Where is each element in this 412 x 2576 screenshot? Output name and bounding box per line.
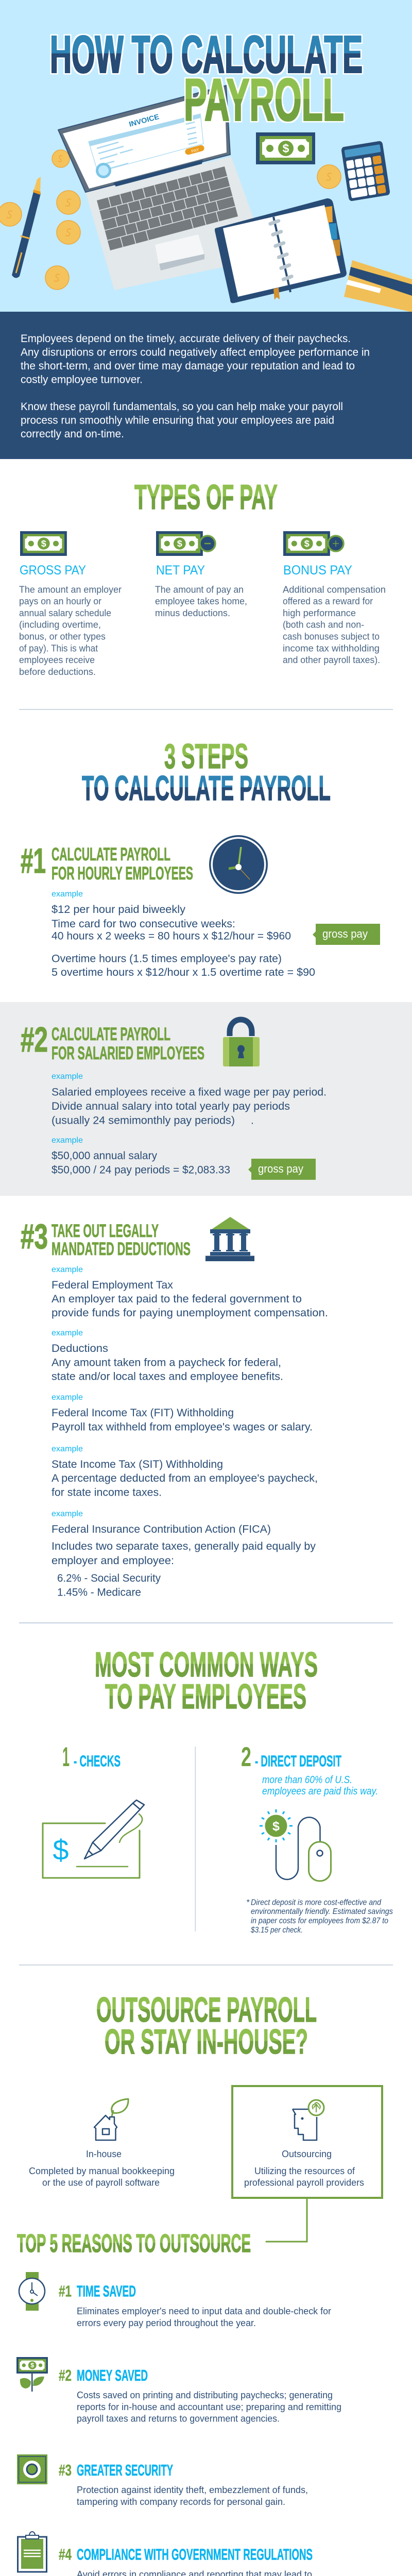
panel: step 1: 40 hours x 2 weeks = 80 hours x $12/hour = $960 [52,930,291,942]
panel: reason 1: TIME SAVED [77,2282,136,2300]
panel: gross pay: GROSS PAY [20,563,86,578]
panel: checks: - CHECKS [74,1752,121,1770]
panel: step 2: Divide annual salary into total yearly pay periods [52,1100,290,1112]
panel: step 1: CALCULATE PAYROLL [52,844,170,865]
panel: reason 1 [19,2272,331,2328]
panel: step 3: Federal Employment Tax [52,1279,173,1291]
invoice screen content: PAY [191,147,200,154]
panel: step 2: $50,000 annual salary [52,1150,157,1162]
panel: step 2 [0,1002,412,1196]
panel: step 1: #1 [21,841,46,880]
panel: bonus pay: offered as a reward for [283,596,373,606]
icon: safe [17,2454,47,2484]
panel: in-house: or the use of payroll software [42,2177,160,2188]
callout: gross pay: gross pay [258,1162,303,1175]
icon: credit card [344,260,412,312]
panel: bonus pay: high performance [283,608,356,618]
panel: step 2: example [52,1072,83,1081]
panel: step 3: TAKE OUT LEGALLY [52,1221,159,1241]
panel: step 1: Overtime hours (1.5 times employee's pay rate) [52,953,282,964]
intro band: costly employee turnover. [21,374,143,385]
invoice screen content [89,112,205,178]
icon: calculator [341,141,390,201]
panel: step 3: State Income Tax (SIT) Withholding [52,1459,223,1470]
panel: reason 3: GREATER SECURITY [77,2461,173,2479]
icon: mouse and dollar [260,1809,331,1881]
panel: reason 3: #3 [59,2461,72,2479]
panel: reason 3: Protection against identity theft, embezzlement of funds, [77,2485,308,2495]
intro band: the short-term, and over time may damage your reputation and lead to [21,360,355,372]
panel: step 3: #3 [21,1217,48,1256]
hero panel [0,0,412,312]
icon: mouse and dollar: $ [272,1819,280,1834]
intro band: correctly and on-time. [21,428,124,440]
panel: reason 4 [18,2532,313,2576]
panel: direct deposit: - DIRECT DEPOSIT [255,1752,341,1770]
panel: reason 2: reports for in-house and accountant use; preparing and remitting [77,2402,341,2412]
icon: dollar bill [256,132,315,164]
icon: clipboard [18,2532,46,2572]
callout: gross pay [313,924,380,945]
panel: gross pay: annual salary schedule [19,608,111,618]
panel: step 1 [21,835,380,978]
panel: step 3: 1.45% - Medicare [57,1587,141,1598]
panel: in-house [29,2099,175,2188]
panel: reason 2 [16,2357,341,2424]
panel: reason 2: payroll taxes and returns to government agencies. [77,2414,280,2424]
icon: bank building [205,1217,254,1261]
icon: dollar bill: $ [283,142,289,155]
heading: types of pay: TYPES OF PAY [134,478,278,517]
panel: direct deposit: more than 60% of U.S. [262,1774,352,1786]
icon: bill: $ [41,538,46,549]
footnote: Direct deposit is more cost-effective and [251,1898,382,1907]
panel: bonus pay [283,531,386,665]
icon: laptop [58,86,268,290]
footnote: in paper costs for employees from $2.87 to [251,1917,388,1925]
icon: bill plus [283,531,344,556]
icon: head with tree [293,2100,324,2140]
panel: reason 4: #4 [59,2546,72,2564]
icon: money plant [16,2357,48,2392]
panel: step 3: example [52,1445,83,1453]
panel: direct deposit: 2 [241,1742,251,1772]
panel: reason 1: #1 [59,2282,72,2300]
panel: step 3: example [52,1265,83,1274]
panel: step 1: 5 overtime hours x $12/hour x 1.5 overtime rate = $90 [52,967,315,978]
panel: step 3: employer and employee: [52,1555,174,1567]
footnote: $3.15 per check. [250,1926,303,1935]
panel: step 3: 6.2% - Social Security [57,1572,161,1584]
intro band: Know these payroll fundamentals, so you can help make your payroll [21,401,343,413]
icon: house with leaf [94,2099,128,2140]
panel: step 1: Time card for two consecutive weeks: [52,918,235,930]
panel: gross pay: (including overtime, [19,620,101,630]
panel: step 2: #2 [21,1020,48,1059]
panel: bonus pay: cash bonuses subject to [283,632,380,642]
panel: reason 1: Eliminates employer's need to input data and double-check for [77,2306,331,2316]
panel: step 3: state and/or local taxes and employee benefits. [52,1371,283,1383]
footnote [246,1898,393,1935]
intro band [0,312,412,459]
intro band: Employees depend on the timely, accurate delivery of their paychecks. [21,333,351,345]
panel: in-house: Completed by manual bookkeeping [29,2166,175,2176]
panel: reason 3: tampering with company records for personal gain. [77,2497,285,2507]
panel: reason 1: errors every pay period throughout the year. [77,2318,256,2328]
panel: bonus pay: BONUS PAY [283,563,352,578]
icon: padlock [223,1020,260,1066]
panel: direct deposit [241,1742,393,1935]
panel: step 1: example [52,890,83,899]
panel: outsourcing: professional payroll providers [244,2177,364,2188]
panel: outsourcing [232,2086,382,2198]
panel: step 3: Includes two separate taxes, generally paid equally by [52,1540,316,1552]
icon: bill minus [156,531,215,556]
panel: bonus pay: Additional compensation [283,584,386,595]
panel: gross pay: bonus, or other types [19,632,106,642]
panel: reason 2: MONEY SAVED [77,2366,148,2384]
panel: reason 3 [17,2454,308,2507]
panel: step 2: example [52,1136,83,1145]
panel: step 3 [21,1217,328,1598]
panel: gross pay: pays on an hourly or [19,596,101,606]
panel: reason 2: #2 [59,2366,72,2384]
panel: step 3: example [52,1393,83,1402]
panel: step 3: example [52,1329,83,1337]
heading: 3 steps [82,737,331,808]
icon: clock [209,835,268,894]
panel: step 2: $50,000 / 24 pay periods = $2,083.33 [52,1164,230,1176]
callout: gross pay: gross pay [322,927,368,940]
heading: outsource payroll [96,1990,317,2061]
panel: step 3: Payroll tax withheld from employee's wages or salary. [52,1421,313,1433]
panel: step 3: for state income taxes. [52,1487,162,1499]
icon: check and pen: $ [53,1834,69,1866]
panel: net pay: NET PAY [156,563,205,578]
intro band: Any disruptions or errors could negatively affect employee performance in [21,346,370,359]
panel: step 3: A percentage deducted from an employee's paycheck, [52,1472,318,1484]
panel: step 3: Federal Insurance Contribution Action (FICA) [52,1523,271,1535]
icon: money plant: $ [30,2362,34,2369]
panel: step 3: MANDATED DEDUCTIONS [52,1239,191,1259]
panel: step 1: FOR HOURLY EMPLOYEES [52,863,193,884]
panel: reason 2: Costs saved on printing and distributing paychecks; generating [77,2390,333,2400]
icon: bill minus: $ [177,538,182,549]
panel: bonus pay: income tax withholding [283,643,380,653]
title [50,25,363,133]
panel: step 2: CALCULATE PAYROLL [52,1024,170,1044]
panel: bonus pay: and other payroll taxes). [283,655,380,665]
footnote: environmentally friendly. Estimated savings [251,1907,393,1916]
panel: step 2: FOR SALARIED EMPLOYEES [52,1043,204,1063]
panel: outsourcing: Outsourcing [282,2149,332,2159]
icon: bill plus: $ [304,538,310,549]
panel: step 2: Salaried employees receive a fixed wage per pay period. [52,1086,327,1098]
panel: gross pay: employees receive [19,655,95,665]
panel: net pay: employee takes home, [155,596,247,606]
panel: step 3: Any amount taken from a paycheck for federal, [52,1357,281,1368]
panel: step 2: . [251,1114,254,1126]
intro band: process run smoothly while ensuring that your employees are paid [21,414,334,427]
panel: gross pay [19,531,122,677]
heading: most common ways [95,1645,318,1716]
panel: step 3: provide funds for paying unemployment compensation. [52,1307,328,1319]
icon: gold coins [0,150,341,290]
heading: 3 steps: 3 STEPS [164,737,248,776]
icon: notebook [215,198,347,303]
panel: step 3: Deductions [52,1343,108,1354]
panel: gross pay: before deductions. [19,667,96,677]
panel: gross pay: The amount an employer [19,584,122,595]
icon: watch [19,2272,45,2311]
panel: checks: 1 [62,1742,70,1772]
panel: step 2: (usually 24 semimonthly pay periods) [52,1114,235,1126]
panel: net pay: The amount of pay an [155,584,244,595]
callout: gross pay [248,1159,316,1180]
panel: in-house: In-house [86,2149,122,2159]
panel: net pay: minus deductions. [155,608,230,618]
icon: bill [20,531,67,556]
footnote: * [246,1898,250,1907]
panel: net pay [155,531,247,618]
panel: step 1: $12 per hour paid biweekly [52,904,186,916]
arrow: connector to top 5 reasons [266,2199,307,2242]
panel: step 3: Federal Income Tax (FIT) Withholding [52,1407,234,1419]
panel: bonus pay: (both cash and non- [283,620,364,630]
panel: gross pay: of pay). This is what [19,643,98,653]
icon: check and pen [43,1800,144,1878]
panel: step 3: example [52,1510,83,1518]
invoice screen content: INVOICE [128,112,160,128]
panel: step 3: An employer tax paid to the federal government to [52,1293,302,1305]
icon: fountain pen [12,177,41,278]
panel: outsourcing: Utilizing the resources of [254,2166,355,2176]
panel: direct deposit: employees are paid this way. [262,1786,378,1797]
panel: checks [43,1742,144,1878]
